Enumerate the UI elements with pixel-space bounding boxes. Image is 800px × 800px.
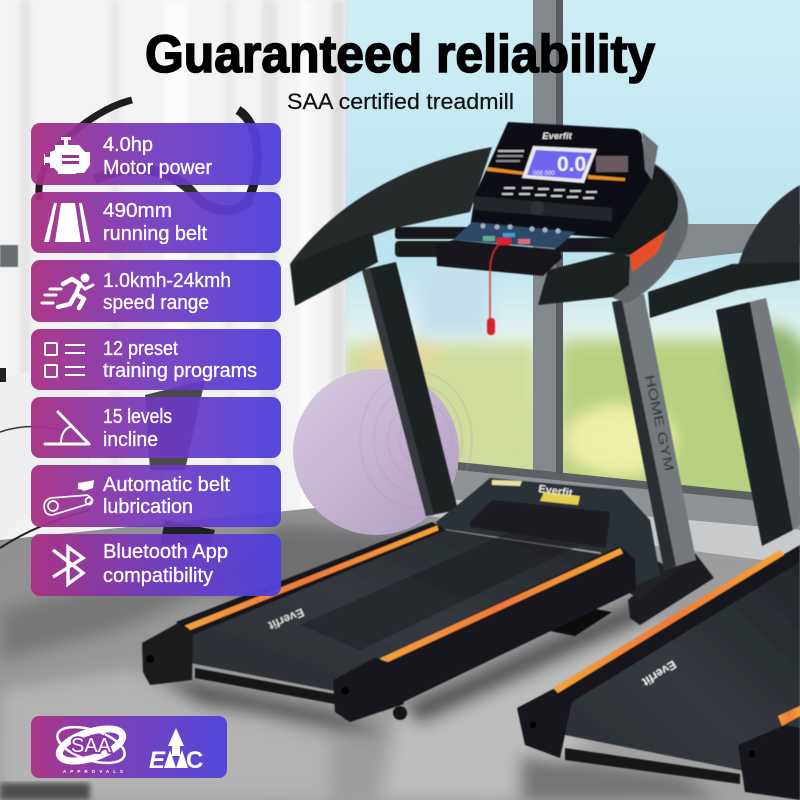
panel: motor power	[31, 123, 281, 185]
control panel	[436, 222, 575, 276]
icon: SAA approvals logo: APPROVALS	[63, 769, 123, 774]
white exercise equipment	[0, 100, 257, 548]
panel: certification badges	[31, 716, 227, 778]
panel: running belt	[31, 192, 281, 253]
text: 4.0hp Motor power	[103, 134, 212, 179]
safety key	[487, 238, 511, 335]
text: 4.0hp Motor power: 4.0hp	[103, 134, 153, 156]
icon: runner	[42, 274, 93, 308]
text: 15 levels incline	[103, 406, 172, 451]
text: 15 levels incline: incline	[103, 429, 158, 451]
LCD screen: 000 000	[533, 171, 555, 177]
icon: SAA approvals logo	[53, 720, 129, 774]
window view	[345, 0, 800, 520]
LCD screen: 0.0	[557, 153, 586, 176]
main treadmill	[142, 122, 714, 722]
text: 490mm running belt	[103, 200, 207, 245]
motor cover: Everfit	[538, 483, 573, 500]
right upright with HOME GYM lettering	[612, 294, 696, 570]
icon: EMC logo: E	[149, 747, 166, 774]
text: Automatic belt lubrication: Automatic belt	[103, 474, 230, 496]
text: 1.0kmh-24kmh speed range: speed range	[103, 292, 209, 314]
icon: motor	[44, 137, 90, 174]
running belt	[178, 530, 612, 692]
left upright	[362, 262, 458, 516]
panel: incline	[31, 397, 281, 458]
icon: EMC logo: C	[186, 747, 203, 774]
under frame	[195, 668, 335, 704]
carpet floor	[0, 505, 800, 800]
text: Automatic belt lubrication	[103, 474, 230, 518]
icon: bluetooth	[53, 547, 83, 584]
text: 1.0kmh-24kmh speed range: 1.0kmh-24kmh	[103, 270, 231, 292]
right side rail and body	[338, 546, 636, 720]
left side rail	[176, 522, 446, 636]
text: Bluetooth App compatibility: compatibility	[103, 565, 213, 587]
icon: SAA approvals logo: SAA	[71, 735, 112, 757]
LCD screen	[522, 146, 597, 183]
panel: preset programs	[31, 329, 281, 390]
text: 12 preset training programs	[103, 338, 257, 382]
text: Automatic belt lubrication: lubrication	[103, 496, 193, 518]
window frame	[345, 0, 800, 580]
text: Bluetooth App compatibility: Bluetooth App	[103, 541, 228, 563]
text: 490mm running belt: running belt	[103, 223, 207, 245]
text: 15 levels incline: 15 levels	[103, 406, 172, 428]
right upright with HOME GYM lettering: HOME GYM	[642, 374, 677, 472]
icon: oil can and belt loop	[43, 480, 94, 516]
icon: EMC logo	[149, 728, 203, 774]
second treadmill (right, partially cropped)	[517, 185, 800, 800]
label: Everfit on second belt: Everfit	[640, 657, 679, 689]
text: Bluetooth App compatibility	[103, 541, 228, 587]
title: Guaranteed reliability	[145, 25, 655, 84]
folding base foot	[535, 540, 714, 636]
handlebar hoops	[290, 147, 688, 306]
belt	[548, 556, 800, 790]
text: 4.0hp Motor power: Motor power	[103, 157, 212, 179]
shadows on belt	[300, 532, 580, 650]
panel: bluetooth	[31, 534, 281, 596]
panel: belt lubrication	[31, 465, 281, 527]
subtitle: SAA certified treadmill	[287, 89, 514, 114]
icon: incline angle	[45, 412, 89, 444]
text: 490mm running belt: 490mm	[103, 200, 172, 222]
console body	[470, 122, 658, 238]
exercise ball	[293, 369, 472, 535]
main treadmill: Everfit	[266, 605, 306, 633]
text: 1.0kmh-24kmh speed range	[103, 270, 231, 314]
front end caps	[142, 622, 407, 722]
text: 12 preset training programs: training programs	[103, 360, 257, 382]
icon: belt road	[44, 203, 90, 242]
curtains	[0, 0, 345, 510]
motor cover	[436, 478, 660, 590]
console body: Everfit	[542, 131, 573, 142]
panel: speed range	[31, 260, 281, 322]
text: 12 preset training programs: 12 preset	[103, 338, 178, 360]
icon: list	[45, 343, 85, 377]
